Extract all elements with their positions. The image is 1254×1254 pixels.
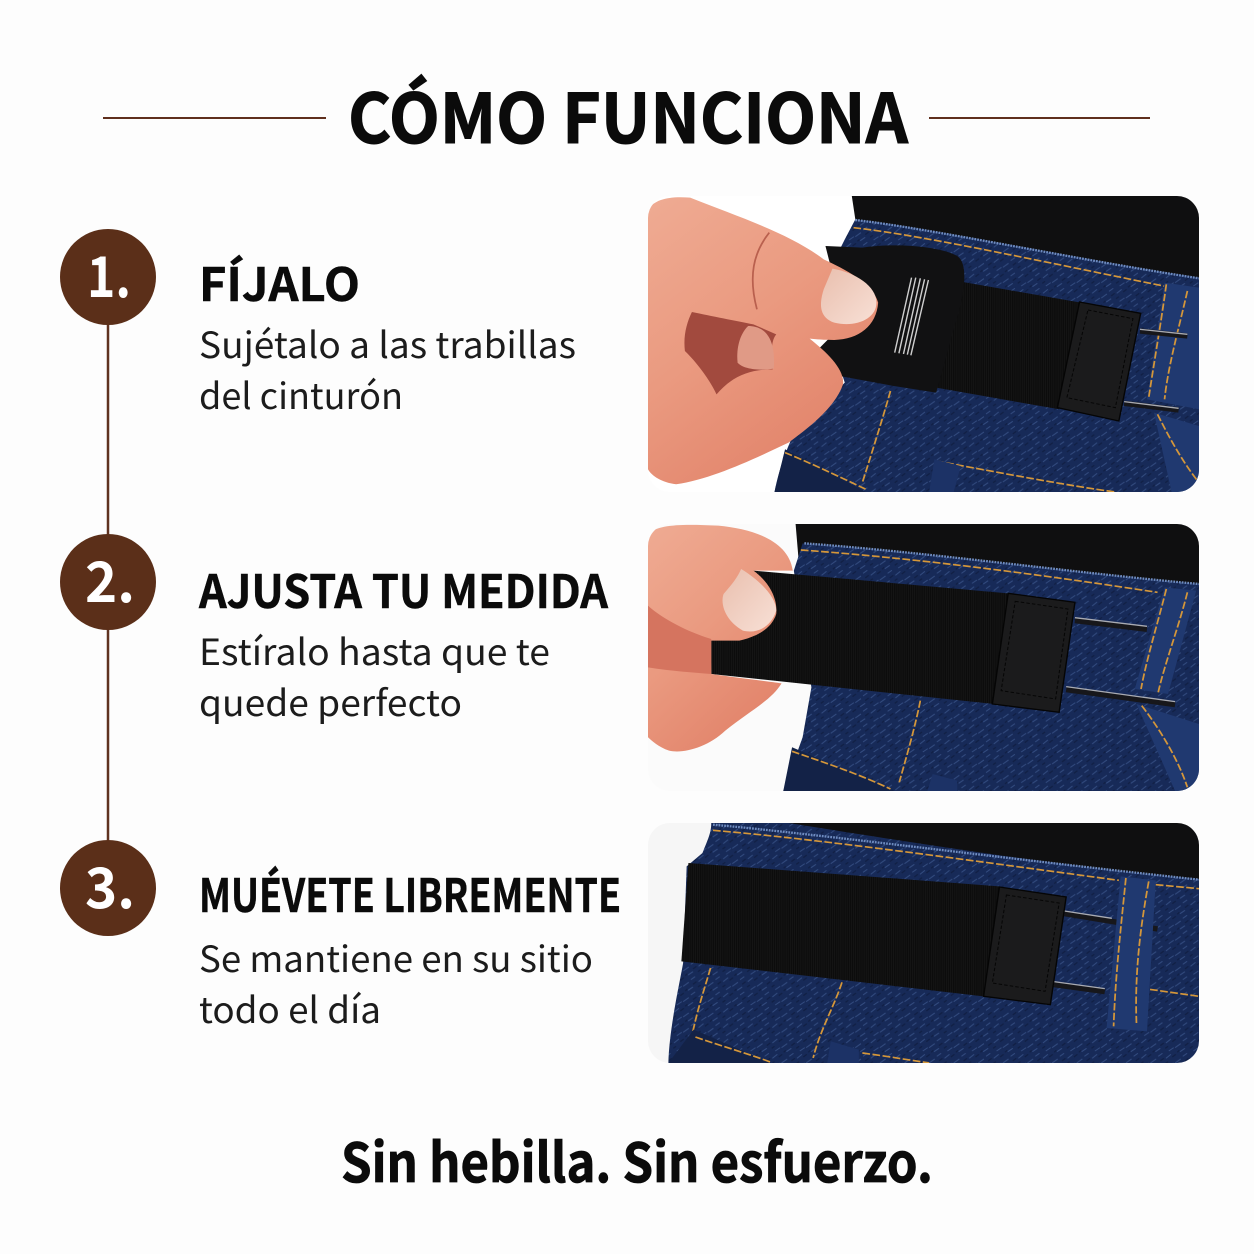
knuckle creases [753, 233, 769, 309]
jeans [783, 543, 1199, 791]
leather tab [984, 887, 1066, 1005]
elastic band [681, 863, 999, 996]
finger shadow [648, 606, 711, 674]
tagline: Sin hebilla. Sin esfuerzo. [341, 1119, 933, 1198]
step 2 text: quede perfecto [199, 675, 462, 727]
jeans [668, 823, 1199, 1063]
step 1 heading: FÍJALO [199, 249, 360, 315]
step 1 text: Sujétalo a las trabillas [199, 317, 576, 369]
step 3 text: todo el día [199, 982, 381, 1034]
black shirt [788, 823, 1199, 879]
step 2 badge: 2. [85, 538, 135, 619]
step 2 heading: AJUSTA TU MEDIDA [198, 556, 608, 622]
step 1 text: del cinturón [199, 368, 403, 420]
hand [648, 525, 793, 751]
hand [648, 197, 878, 484]
folded band end [815, 245, 964, 393]
step 1 badge: 1. [87, 233, 131, 314]
metal hooks [1054, 911, 1158, 992]
thumb nail [723, 569, 776, 631]
step 2 badge [60, 534, 156, 630]
elastic band [936, 281, 1081, 409]
elastic band [711, 571, 1008, 704]
step 3 badge [60, 840, 156, 936]
step 1 text [199, 317, 576, 420]
white stitched stripes [895, 278, 928, 355]
metal hooks [1066, 618, 1175, 705]
jeans [775, 219, 1199, 492]
leather tab [992, 593, 1075, 712]
thumb nail [821, 269, 876, 324]
step 1 badge [60, 229, 156, 325]
timeline connector [107, 320, 109, 845]
photo 2: hand stretching band [648, 524, 1199, 791]
metal hooks [1124, 329, 1187, 410]
step 3 badge: 3. [85, 844, 135, 925]
title: CÓMO FUNCIONA [348, 64, 908, 163]
belt loop [1107, 876, 1156, 1031]
leather tab [1057, 302, 1141, 421]
black shirt [852, 196, 1199, 278]
step 2 text [199, 624, 550, 727]
palm shadow [684, 312, 776, 394]
step 2 text: Estíralo hasta que te [199, 624, 550, 676]
curled finger [737, 326, 774, 370]
photo 3: band in place [648, 823, 1199, 1063]
black shirt [796, 524, 1199, 584]
photo 1: hand fastening band to belt loops [648, 196, 1199, 492]
step 3 text [199, 931, 593, 1034]
step 3 heading: MUÉVETE LIBREMENTE [199, 860, 621, 926]
step 3 text: Se mantiene en su sitio [199, 931, 593, 983]
